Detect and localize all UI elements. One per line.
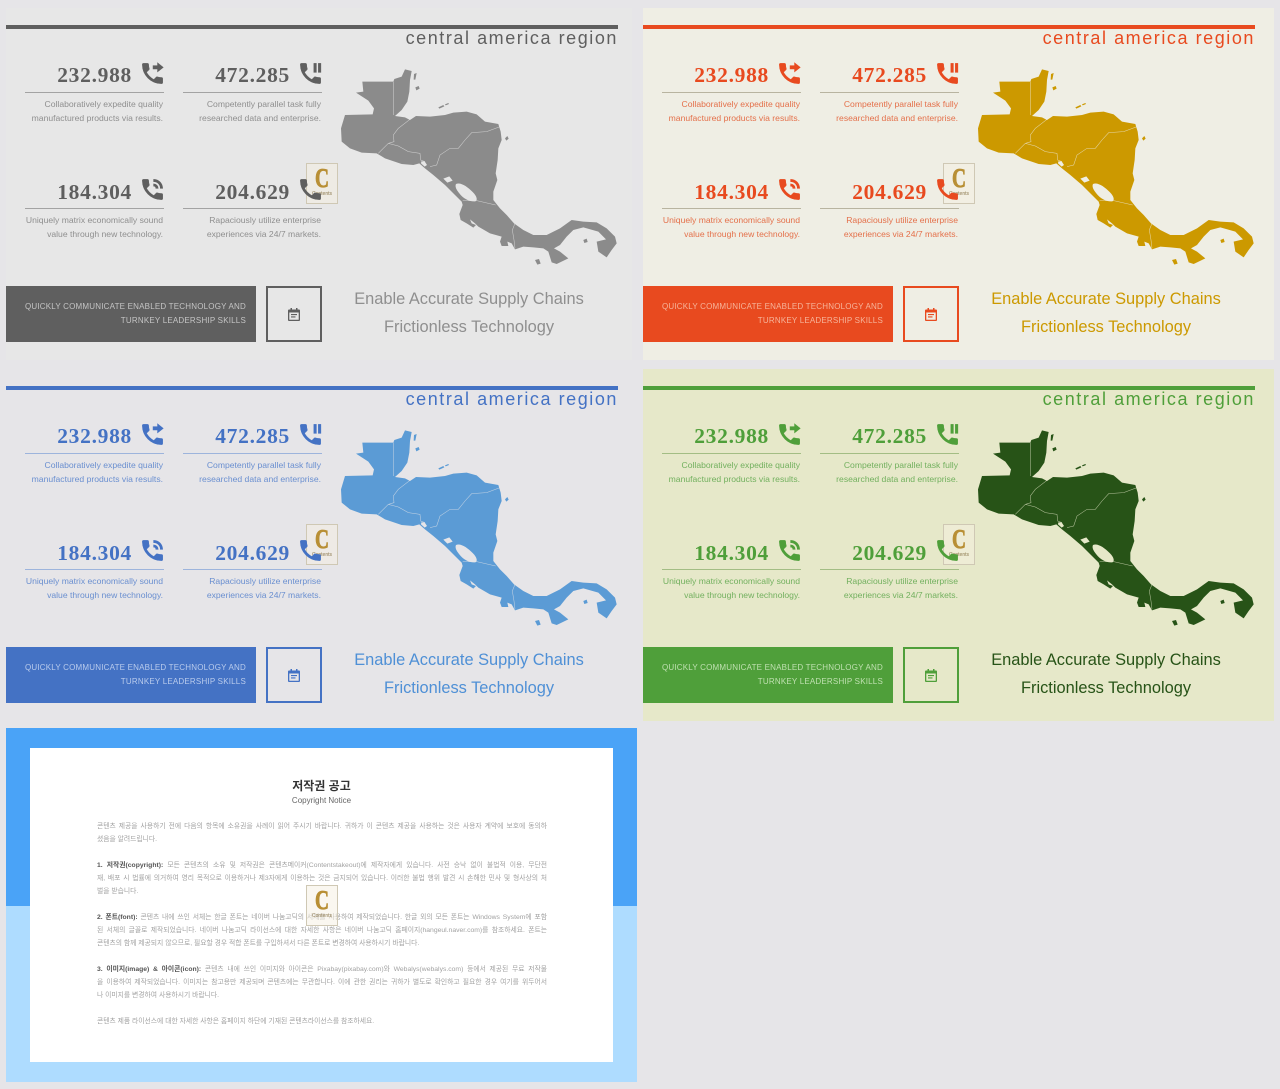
text banner: TURNKEY LEADERSHIP SKILLS xyxy=(121,677,246,686)
heading text: Frictionless Technology xyxy=(1021,679,1191,697)
stat: 184.304: 184.304 xyxy=(57,180,132,204)
stat: 204.629 xyxy=(820,540,959,600)
notice sheet xyxy=(30,748,613,1062)
stat: 472.285 xyxy=(183,424,322,484)
watermark badge: C xyxy=(315,524,329,554)
stat: 184.304: Uniquely matrix economically sound xyxy=(26,215,163,225)
stat: 184.304 xyxy=(662,179,801,239)
notice body: 을 이용하여 제작되었습니다. 이미지는 참고용만 제공되며 콘텐츠에는 무관합니다. 이에 관한 권리는 귀하가 별도로 확인하고 필요한 경우 여기를 위두어서 xyxy=(97,978,547,986)
notice body: 나 이미지를 변경하여 사용하시기 바랍니다. xyxy=(97,992,219,998)
map: Central America xyxy=(978,69,1254,265)
watermark badge: Contents xyxy=(312,552,332,558)
region title: central america region xyxy=(1043,389,1255,409)
stat: 184.304 xyxy=(25,179,164,239)
stat: 232.988: Collaboratively expedite quality xyxy=(45,460,163,470)
stat: 184.304: Uniquely matrix economically sound xyxy=(26,576,163,586)
stat: 204.629: experiences via 24/7 markets. xyxy=(207,590,321,600)
stat: 232.988: Collaboratively expedite quality xyxy=(682,99,800,109)
stat: 204.629: Rapaciously utilize enterprise xyxy=(846,576,958,586)
text banner: QUICKLY COMMUNICATE ENABLED TECHNOLOGY AND xyxy=(662,302,883,311)
stat: 184.304: value through new technology. xyxy=(47,229,163,239)
text banner: TURNKEY LEADERSHIP SKILLS xyxy=(758,316,883,325)
stat: 204.629: 204.629 xyxy=(852,541,927,565)
stat: 184.304: Uniquely matrix economically sound xyxy=(663,576,800,586)
stat: 472.285 xyxy=(820,63,959,123)
heading text: Enable Accurate Supply Chains xyxy=(354,290,584,308)
stat: 472.285: 472.285 xyxy=(852,424,927,448)
stat: 472.285: Competently parallel task fully xyxy=(844,460,958,470)
stat: 472.285: researched data and enterprise. xyxy=(836,113,958,123)
notice body: 콘텐츠의 함께 제공되지 않으므로, 필요할 경우 적합 폰트를 구입하셔서 다른 폰트로 변경하여 사용하시기 바랍니다. xyxy=(97,940,419,946)
stat: 472.285: 472.285 xyxy=(215,63,290,87)
stat: 472.285: researched data and enterprise. xyxy=(199,474,321,484)
stat: 232.988: 232.988 xyxy=(57,63,132,87)
header bar xyxy=(643,386,1255,390)
text banner xyxy=(643,286,893,342)
map: Central America xyxy=(341,430,617,626)
icon box: calendar xyxy=(266,647,322,703)
map: Central America xyxy=(341,69,617,265)
stat: 204.629 xyxy=(183,540,322,600)
stat: 204.629: 204.629 xyxy=(215,180,290,204)
notice body: 된 서체의 글꼴로 제작되었습니다. 네이버 나눔고딕 라이선스에 대한 자세한 사항은 네이버 나눔고딕 홈페이지(hangeul.naver.com)를 참조하세요. 폰트는 xyxy=(97,926,547,934)
header bar xyxy=(643,25,1255,29)
notice body xyxy=(97,822,547,1024)
stat: 472.285 xyxy=(183,63,322,123)
stat: 232.988: manufactured products via results. xyxy=(32,474,163,484)
stat: 184.304: value through new technology. xyxy=(684,229,800,239)
stat: 232.988: manufactured products via results. xyxy=(669,474,800,484)
stat: 232.988: manufactured products via results. xyxy=(32,113,163,123)
stat: 204.629 xyxy=(820,179,959,239)
stat: 232.988: manufactured products via results. xyxy=(669,113,800,123)
region title: central america region xyxy=(1043,28,1255,48)
panel: copyright notice xyxy=(6,728,637,1082)
notice body: 2. 폰트(font): 콘텐츠 내에 쓰인 서체는 한글 폰트는 네이버 나눔고딕의 서체를 사용하여 제작되었습니다. 한글 외의 모든 폰트는 Windows System에 포함 xyxy=(97,914,547,920)
notice body: 재, 배포 시 법률에 의거하여 영리 목적으로 이용하거나 제3자에게 이용하는 것은 금지되어 있습니다. 이러한 불법 행위 발견 시 손해한 민사 및 형사상의 처 xyxy=(97,874,547,882)
notice title: 저작권 공고 xyxy=(292,779,351,793)
watermark badge: C xyxy=(315,885,329,915)
heading text xyxy=(991,650,1221,697)
heading text xyxy=(354,650,584,697)
stat: 204.629: experiences via 24/7 markets. xyxy=(844,229,958,239)
notice subtitle: Copyright Notice xyxy=(292,796,351,805)
stat: 472.285: Competently parallel task fully xyxy=(207,460,321,470)
watermark badge xyxy=(306,163,338,204)
panel: blue variant xyxy=(1,369,632,721)
stat: 472.285: Competently parallel task fully xyxy=(844,99,958,109)
stat: 472.285: 472.285 xyxy=(852,63,927,87)
region title: central america region xyxy=(406,28,618,48)
stat: 232.988: 232.988 xyxy=(57,424,132,448)
stat: 204.629: experiences via 24/7 markets. xyxy=(207,229,321,239)
panel: green variant xyxy=(643,369,1274,721)
header bar xyxy=(6,386,618,390)
watermark badge: C xyxy=(952,524,966,554)
stat: 204.629: 204.629 xyxy=(215,541,290,565)
watermark badge: Contents xyxy=(312,191,332,197)
panel: orange variant xyxy=(643,8,1274,360)
stat: 232.988 xyxy=(25,62,164,123)
header bar xyxy=(6,25,618,29)
stat: 472.285: researched data and enterprise. xyxy=(836,474,958,484)
stat: 184.304: value through new technology. xyxy=(47,590,163,600)
text banner xyxy=(6,286,256,342)
stat: 184.304: 184.304 xyxy=(694,541,769,565)
heading text: Enable Accurate Supply Chains xyxy=(991,650,1221,668)
stat: 204.629: 204.629 xyxy=(852,180,927,204)
icon box: calendar xyxy=(266,286,322,342)
stat: 184.304 xyxy=(25,540,164,600)
stat: 232.988: Collaboratively expedite quality xyxy=(682,460,800,470)
heading text xyxy=(354,290,584,336)
icon box: calendar xyxy=(903,647,959,703)
notice body: 1. 저작권(copyright): 모든 콘텐츠의 소유 및 저작권은 콘텐츠메이커(Contentstakeout)에 제작자에게 있습니다. 사전 승낙 없이 불법적 이용, 무단전 xyxy=(97,862,547,868)
stat: 232.988 xyxy=(662,423,801,484)
stat: 232.988: 232.988 xyxy=(694,424,769,448)
notice body: 3. 이미지(image) & 아이콘(icon): 콘텐츠 내에 쓰인 이미지와 아이콘은 Pixabay(pixabay.com)와 Webalys(webalys.com) 등에서 제공된 무료 저작물 xyxy=(97,966,547,972)
stat: 232.988: 232.988 xyxy=(694,63,769,87)
notice body: 콘텐츠 제공을 사용하기 전에 다음의 항목에 소유권을 사례이 읽어 주시기 바랍니다. 귀하가 이 콘텐츠 제공을 사용하는 것은 사용자 계약에 보호에 동의하 xyxy=(97,822,547,830)
stat: 204.629: Rapaciously utilize enterprise xyxy=(846,215,958,225)
stat: 232.988 xyxy=(25,423,164,484)
panel: gray variant xyxy=(1,8,632,360)
heading text xyxy=(991,290,1221,336)
stat: 184.304: value through new technology. xyxy=(684,590,800,600)
stat: 184.304: Uniquely matrix economically sound xyxy=(663,215,800,225)
heading text: Enable Accurate Supply Chains xyxy=(354,650,584,668)
stat: 472.285: researched data and enterprise. xyxy=(199,113,321,123)
map: Central America xyxy=(978,430,1254,626)
stat: 472.285: Competently parallel task fully xyxy=(207,99,321,109)
watermark badge xyxy=(306,524,338,565)
text banner xyxy=(643,647,893,703)
icon box: calendar xyxy=(903,286,959,342)
heading text: Frictionless Technology xyxy=(384,679,554,697)
stat: 184.304 xyxy=(662,540,801,600)
stat: 184.304: 184.304 xyxy=(694,180,769,204)
text banner: TURNKEY LEADERSHIP SKILLS xyxy=(121,316,246,325)
watermark badge: Contents xyxy=(949,191,969,197)
stat: 232.988: Collaboratively expedite quality xyxy=(45,99,163,109)
stat: 204.629: Rapaciously utilize enterprise xyxy=(209,215,321,225)
stat: 232.988 xyxy=(662,62,801,123)
heading text: Frictionless Technology xyxy=(1021,318,1191,336)
stat: 472.285: 472.285 xyxy=(215,424,290,448)
stat: 204.629: experiences via 24/7 markets. xyxy=(844,590,958,600)
stat: 184.304: 184.304 xyxy=(57,541,132,565)
watermark badge xyxy=(943,163,975,204)
notice body: 셨음을 알려드립니다. xyxy=(97,836,157,842)
text banner: QUICKLY COMMUNICATE ENABLED TECHNOLOGY AND xyxy=(25,302,246,311)
region title: central america region xyxy=(406,389,618,409)
text banner: QUICKLY COMMUNICATE ENABLED TECHNOLOGY AND xyxy=(662,663,883,672)
text banner xyxy=(6,647,256,703)
text banner: QUICKLY COMMUNICATE ENABLED TECHNOLOGY AND xyxy=(25,663,246,672)
watermark badge: Contents xyxy=(312,913,332,919)
watermark badge xyxy=(943,524,975,565)
stat: 472.285 xyxy=(820,424,959,484)
watermark badge: Contents xyxy=(949,552,969,558)
stat: 204.629 xyxy=(183,179,322,239)
watermark badge: C xyxy=(315,163,329,193)
notice body: 콘텐츠 제품 라이선스에 대한 자세한 사항은 홈페이지 하단에 기재된 콘텐츠라이선스를 참조하세요. xyxy=(97,1018,374,1024)
watermark badge xyxy=(306,885,338,926)
notice body: 벌을 받습니다. xyxy=(97,888,138,894)
heading text: Enable Accurate Supply Chains xyxy=(991,290,1221,308)
watermark badge: C xyxy=(952,163,966,193)
heading text: Frictionless Technology xyxy=(384,318,554,336)
stat: 204.629: Rapaciously utilize enterprise xyxy=(209,576,321,586)
text banner: TURNKEY LEADERSHIP SKILLS xyxy=(758,677,883,686)
